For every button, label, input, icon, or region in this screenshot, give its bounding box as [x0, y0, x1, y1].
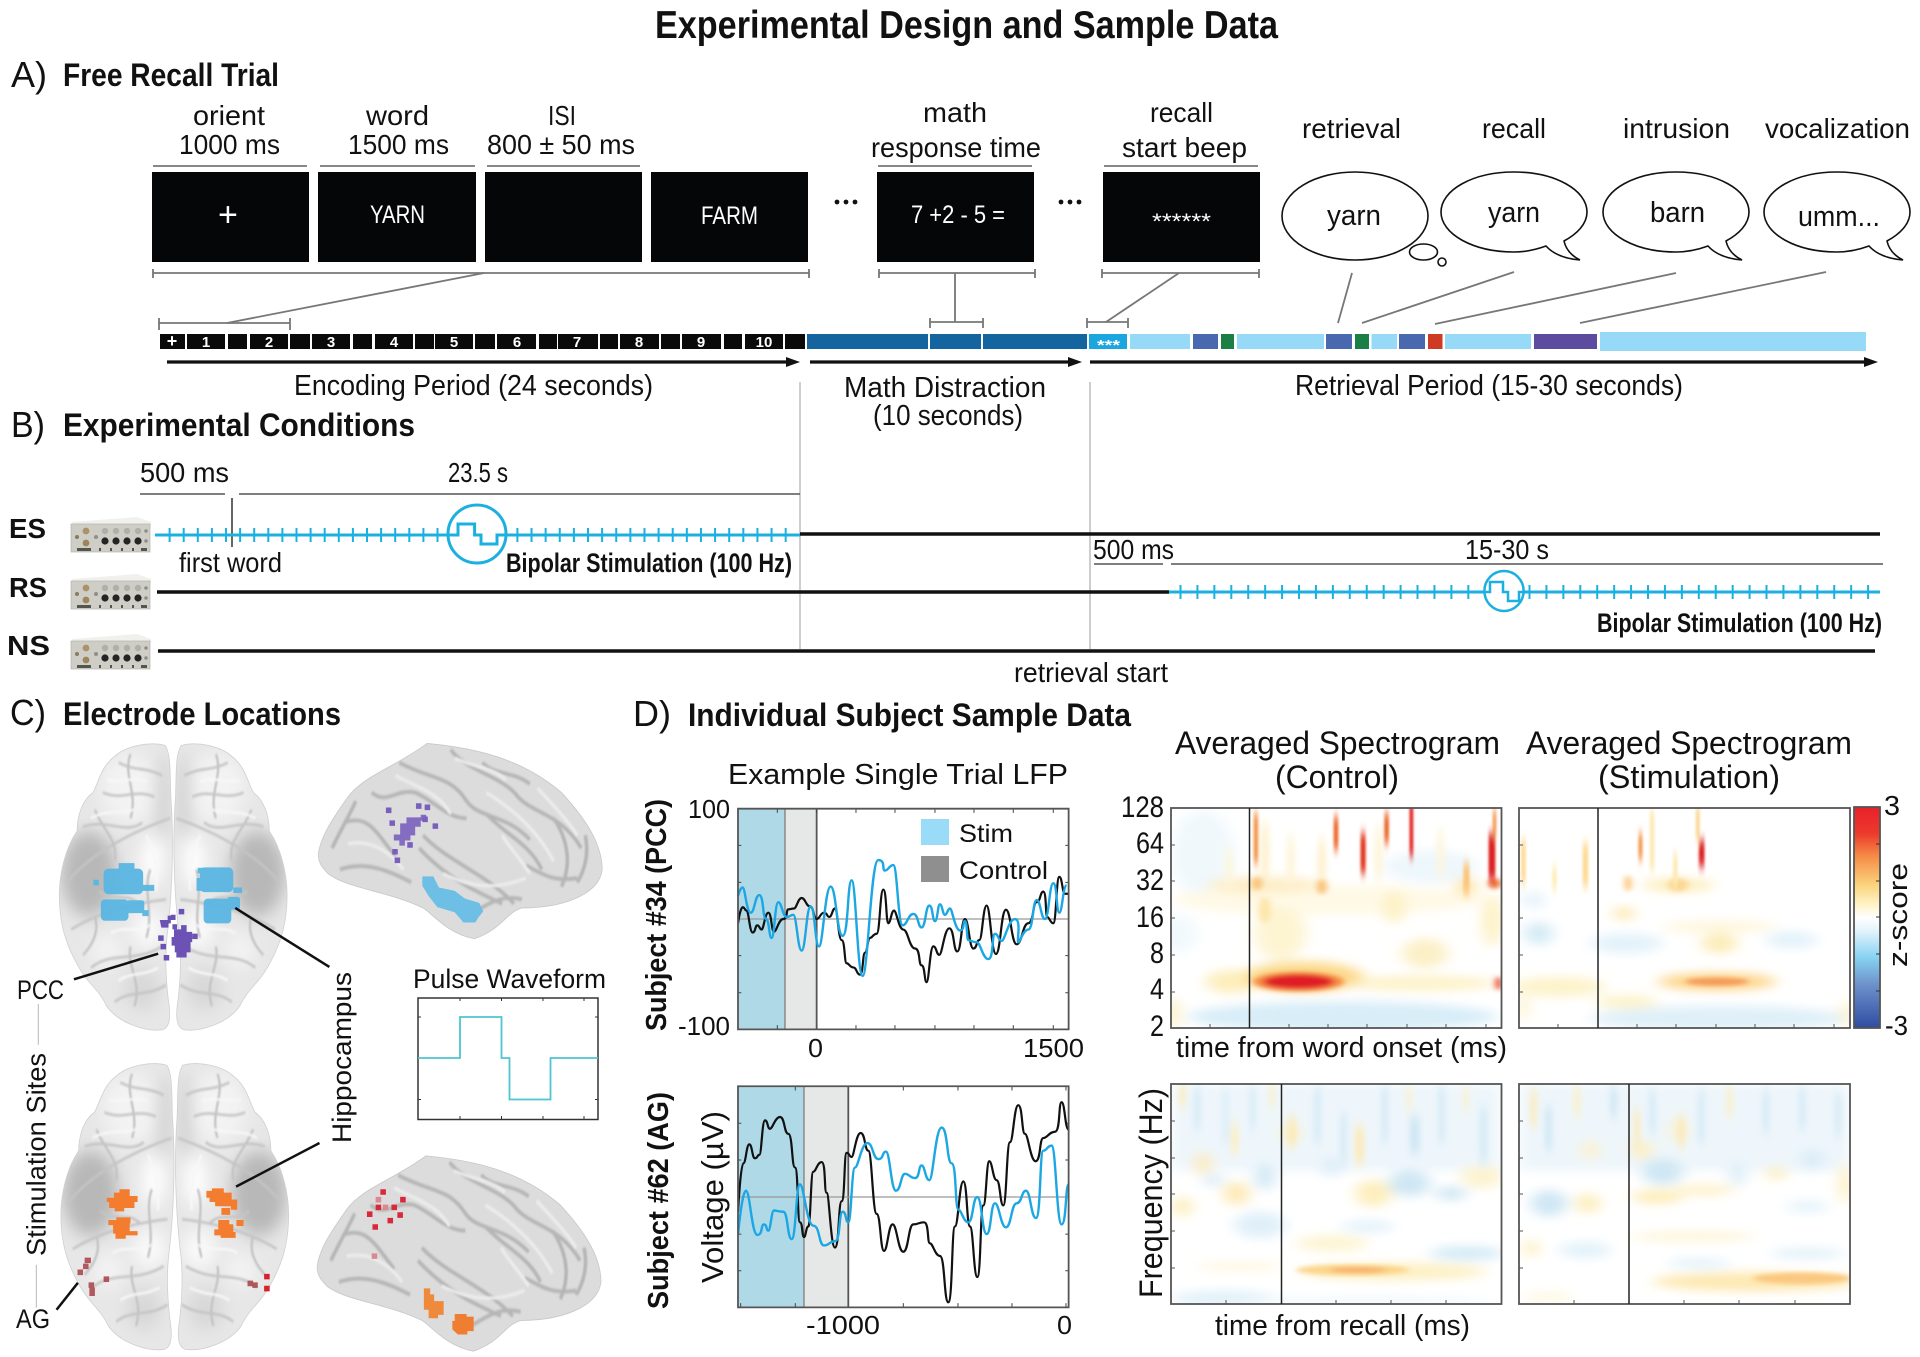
LFP axis labels: Subject #34 (PCC) [641, 799, 673, 1031]
screen labels: intrusion [1623, 113, 1730, 144]
heading: D: D) [633, 693, 671, 734]
period arrows [167, 357, 1878, 367]
screen labels [179, 97, 1910, 163]
spectrogram axis labels: time from recall (ms) [1215, 1310, 1470, 1342]
frequency tick labels: 32 [1136, 864, 1164, 897]
heading: B: Experimental Conditions [63, 407, 415, 443]
LFP title: Example Single Trial LFP [728, 759, 1068, 791]
colorbar: z-score [1883, 863, 1913, 967]
spectrogram axis labels [1133, 1032, 1507, 1342]
encoding timeline cells: 10 [756, 334, 772, 351]
spectrogram titles: Averaged Spectrogram [1526, 725, 1852, 761]
chart: subject 62 [738, 1086, 1069, 1307]
panel: D individual subject sample data [633, 693, 1913, 1342]
LFP axis labels: -1000 [806, 1310, 880, 1340]
condition baselines [157, 534, 1880, 651]
bubble words: umm... [1798, 201, 1880, 233]
top-view brain: hippocampus and PCC [59, 744, 287, 1030]
LFP axis labels: Subject #62 (AG) [643, 1092, 675, 1309]
spectrogram: control, word onset [1172, 808, 1501, 1027]
leader lines [57, 908, 329, 1310]
spectrogram: stimulation, recall [1519, 1084, 1859, 1301]
period labels [294, 370, 1683, 432]
bubble words [1327, 197, 1880, 233]
stimulus screens: ****** [1152, 209, 1211, 234]
spectrogram titles [1175, 725, 1852, 795]
colorbar: -3 [1885, 1010, 1908, 1041]
region labels: Stimulation Sites [22, 1053, 52, 1256]
colorbar [1854, 790, 1913, 1041]
timing labels: first word [179, 547, 282, 578]
panel: B experimental conditions [7, 404, 1883, 688]
frequency tick labels: 128 [1121, 791, 1164, 824]
LFP axis labels: 100 [688, 794, 730, 824]
pulse waveform inset [413, 964, 606, 1120]
bubble words: yarn [1327, 200, 1381, 232]
pulse waveform inset: Pulse Waveform [413, 964, 606, 994]
chart legend [921, 819, 1048, 885]
timing labels: 15-30 s [1465, 534, 1549, 565]
encoding timeline cells: 5 [450, 334, 458, 351]
thought and speech bubbles [1282, 172, 1910, 266]
period labels: Math Distraction [844, 372, 1046, 404]
LFP charts [738, 809, 1069, 1307]
heading: C: C) [10, 692, 46, 733]
side-view brain: hippocampus and PCC [318, 743, 602, 939]
spectrogram: control, recall [1171, 1083, 1503, 1306]
retrieval timeline cells [1089, 332, 1866, 354]
LFP axis labels: 0 [1057, 1310, 1072, 1340]
first word marker [231, 498, 233, 547]
LFP axis labels [641, 794, 1084, 1340]
encoding timeline cells: 8 [635, 334, 643, 351]
region labels: PCC [17, 975, 64, 1005]
stimulus screens [152, 172, 1260, 262]
condition labels [7, 513, 50, 661]
stimulus screens: YARN [370, 201, 425, 229]
encoding timeline cells: 2 [265, 334, 273, 351]
period labels: Encoding Period (24 seconds) [294, 370, 653, 402]
encoding timeline cells: 4 [390, 334, 399, 351]
frequency tick labels: 64 [1136, 827, 1164, 860]
LFP axis labels: -100 [678, 1011, 730, 1041]
condition labels: NS [7, 630, 50, 661]
ES stimulation label: Bipolar Stimulation (100 Hz) [506, 548, 792, 578]
region labels [16, 972, 357, 1334]
screen labels: retrieval [1302, 113, 1401, 144]
spectrogram axis labels: Frequency (Hz) [1133, 1088, 1169, 1298]
chart legend: Control [959, 857, 1048, 885]
LFP axis labels: 1500 [1023, 1033, 1084, 1063]
timing rules [140, 494, 1883, 564]
condition labels: RS [9, 572, 47, 603]
encoding timeline cells: + [167, 331, 177, 351]
condition labels: ES [9, 513, 46, 544]
chart legend: Stim [959, 820, 1013, 848]
screen labels: word [365, 100, 429, 131]
vertical period dividers [800, 382, 1090, 649]
frequency tick labels: 2 [1150, 1010, 1164, 1043]
timing labels [140, 457, 1549, 688]
colorbar: 3 [1884, 790, 1900, 821]
heading: C [10, 692, 341, 733]
stimulus screens: FARM [701, 202, 758, 230]
screen labels: recall [1150, 97, 1213, 128]
region labels: AG [16, 1304, 50, 1334]
frequency tick labels: 16 [1136, 901, 1164, 934]
encoding timeline cells: 7 [573, 334, 581, 351]
heading: A: Free Recall Trial [63, 57, 279, 93]
period labels: Retrieval Period (15-30 seconds) [1295, 370, 1683, 402]
timing labels: 500 ms [1093, 534, 1174, 565]
heading: B: B) [11, 404, 45, 445]
frequency tick labels [1121, 791, 1164, 1043]
panel: C electrode locations [10, 692, 606, 1351]
heading: D: Individual Subject Sample Data [688, 697, 1131, 733]
heading: C: Electrode Locations [63, 696, 341, 732]
side-view brain: hippocampus and AG [317, 1156, 601, 1351]
timing labels: 500 ms [140, 457, 229, 488]
LFP axis labels: Voltage (µV) [695, 1111, 730, 1283]
encoding timeline cells: 1 [202, 334, 210, 351]
timing labels: retrieval start [1014, 657, 1168, 688]
screen labels: vocalization [1765, 113, 1910, 144]
math timeline cells [807, 334, 1087, 349]
frequency tick labels: 4 [1150, 973, 1164, 1006]
screen labels: math [923, 97, 987, 128]
spectrogram titles: (Stimulation) [1598, 759, 1780, 795]
title: Experimental Design and Sample Data [655, 4, 1278, 47]
frequency tick labels: 8 [1150, 937, 1164, 970]
ES stimulation train [155, 505, 800, 563]
top-view brain: hippocampus and AG [61, 1064, 289, 1350]
chart: subject 34 [738, 809, 1069, 1029]
stimulus screens: 7 +2 - 5 = [911, 201, 1005, 229]
encoding timeline cells [160, 331, 805, 351]
screen labels: start beep [1122, 132, 1247, 163]
heading: A [11, 54, 279, 95]
spectrogram titles: (Control) [1275, 759, 1399, 795]
encoding timeline cells: 6 [513, 334, 521, 351]
spectrogram axis labels: time from word onset (ms) [1176, 1032, 1507, 1064]
screen labels: 1000 ms [179, 129, 280, 160]
screen labels: 1500 ms [348, 129, 449, 160]
encoding timeline cells: 9 [697, 334, 705, 351]
screen labels: orient [193, 100, 265, 131]
screen labels: recall [1482, 113, 1546, 144]
spectrograms: word onset [1156, 800, 1853, 1032]
bubble words: barn [1650, 197, 1705, 229]
bubble words: yarn [1488, 197, 1540, 229]
screen labels: ISI [548, 100, 576, 131]
screen labels: response time [871, 132, 1041, 163]
spectrograms: recall [1171, 1083, 1859, 1306]
period labels: (10 seconds) [873, 400, 1023, 432]
overlines and brackets [153, 166, 1826, 330]
ellipsis dots [835, 200, 1081, 204]
heading: A: A) [11, 54, 47, 95]
region labels: Hippocampus [327, 972, 357, 1143]
retrieval timeline cells: *** [1097, 337, 1120, 354]
LFP axis labels: 0 [808, 1033, 823, 1063]
RS stimulation train [1169, 571, 1880, 611]
screen labels: 800 ± 50 ms [487, 129, 635, 160]
spectrogram frames and onset lines [1171, 808, 1850, 1304]
panel: A free recall trial [11, 54, 1910, 432]
icon: stimulator devices [71, 517, 151, 669]
spectrogram: stimulation, word onset [1513, 807, 1853, 1031]
stimulus screens: + [218, 196, 238, 234]
timing labels: 23.5 s [448, 457, 508, 488]
spectrogram titles: Averaged Spectrogram [1175, 725, 1500, 761]
encoding timeline cells: 3 [327, 334, 335, 351]
brain renderings with electrodes [36, 743, 602, 1351]
